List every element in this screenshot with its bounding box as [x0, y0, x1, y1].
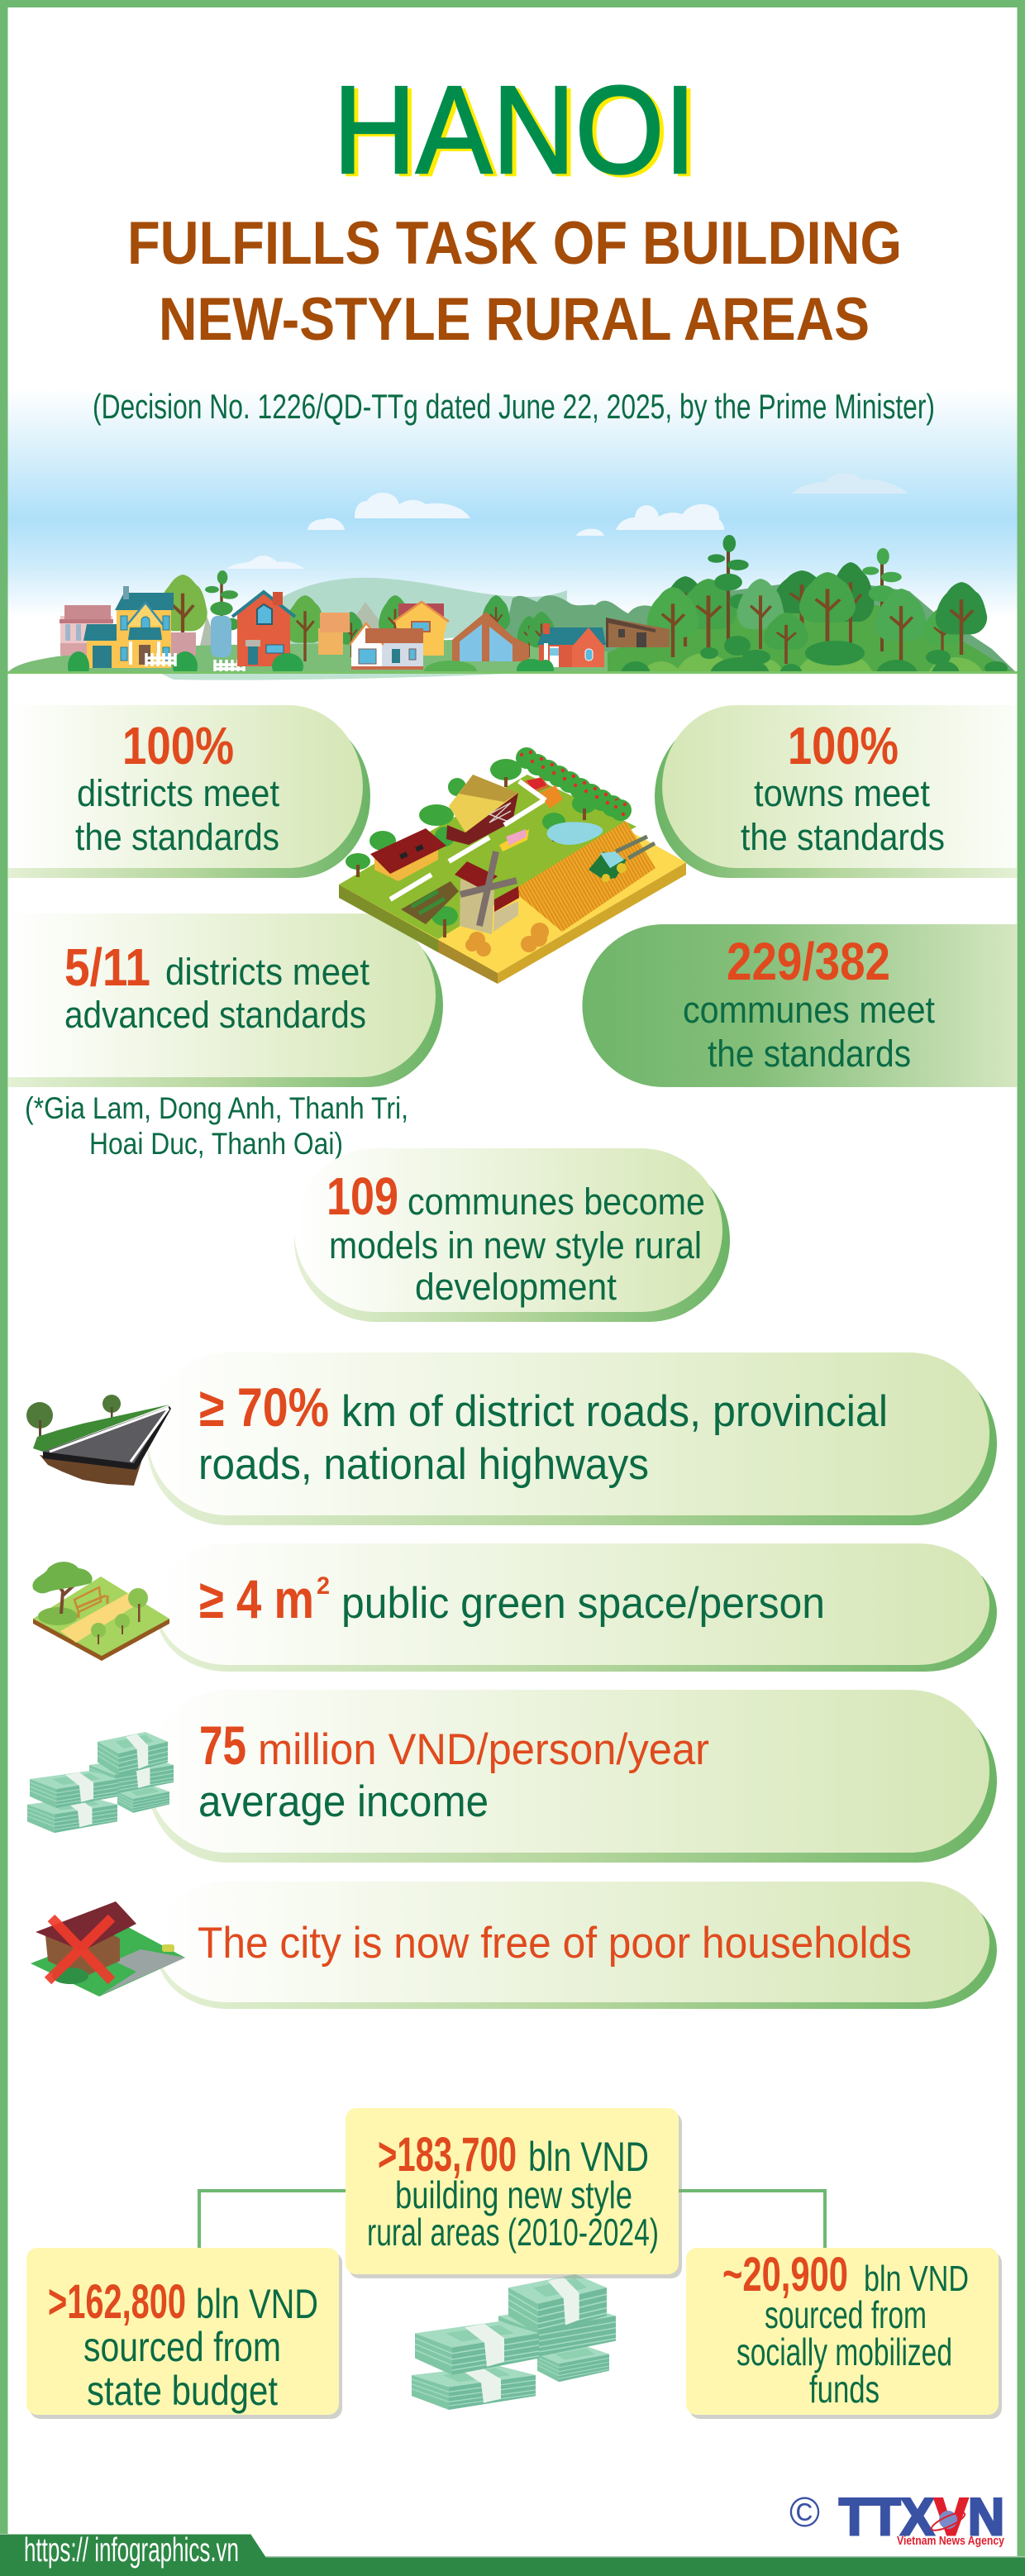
hay bales: [465, 923, 549, 956]
description: [75, 772, 279, 858]
stat: 75: [199, 1715, 246, 1776]
footnote: list of districts: (*Gia Lam, Dong Anh, Thanh Tri,: [25, 1091, 408, 1125]
description: roads, national highways: [198, 1440, 649, 1489]
subtitle: NEW-STYLE RURAL AREAS: [159, 286, 870, 353]
forest domes: [647, 653, 982, 671]
ground reflection: [161, 674, 504, 680]
subtitle: FULFILLS TASK OF BUILDING: [127, 210, 902, 277]
fruit truck: [523, 777, 550, 794]
panel: 229/382 communes: [582, 924, 1017, 1087]
footer bar: [0, 2534, 1025, 2576]
stat: 229/382: [727, 932, 890, 991]
stat: 100%: [788, 716, 899, 775]
pink house: [60, 616, 112, 643]
fences: [145, 653, 245, 673]
box: total funding: [346, 2108, 682, 2278]
unit: bln VND: [196, 2281, 318, 2327]
description: districts meet: [77, 772, 279, 814]
tractor: [589, 852, 627, 880]
illustration: isometric farm: [339, 747, 686, 984]
ground left: [8, 640, 608, 671]
description: communes meet: [683, 989, 935, 1031]
stat: 5/11: [64, 937, 150, 997]
trees: [346, 759, 597, 937]
income value: million VND/person/year: [258, 1725, 709, 1774]
description: advanced standards: [64, 994, 366, 1036]
stat: ≥ 70%: [199, 1376, 329, 1438]
red small house: [539, 643, 604, 667]
yellow house: [117, 610, 171, 668]
description: state budget: [87, 2368, 278, 2414]
long house: [374, 848, 438, 881]
description: districts meet: [165, 951, 369, 993]
white house: [382, 643, 423, 666]
box: socially mobilized funds: [686, 2248, 1002, 2419]
barn: [446, 793, 518, 845]
description: the standards: [741, 816, 945, 858]
title: Hanoi: HANOI: [333, 60, 696, 199]
description: development: [415, 1266, 617, 1308]
panel: 5/11 districts advanced: [8, 914, 443, 1087]
description: public green space/person: [341, 1579, 825, 1628]
box: state budget: [26, 2248, 342, 2419]
stat: 2: [317, 1572, 330, 1600]
statement: The city is now free of poor households: [198, 1919, 912, 1968]
description: socially mobilized: [737, 2330, 952, 2373]
wheat field: [512, 821, 656, 932]
description: [83, 2324, 281, 2414]
stat: 100%: [122, 716, 234, 775]
icon: crossed-out house: [31, 1901, 185, 1996]
description: km of district roads, provincial: [341, 1387, 888, 1436]
logo: TTXVN: TTXVN: [839, 2488, 1004, 2546]
subtitle: [127, 210, 902, 353]
description: the standards: [75, 816, 279, 858]
icon: road: [26, 1395, 171, 1486]
wooden cabin: [606, 618, 670, 647]
description: sourced from: [83, 2324, 281, 2370]
description: [737, 2293, 952, 2411]
copyright symbol: ©: [789, 2488, 820, 2535]
footnote: list of districts: [25, 1091, 408, 1161]
illustration: money stacks: [412, 2274, 616, 2410]
sky gradient background: [7, 389, 1018, 675]
forest bushes: [622, 636, 1008, 671]
icon: money stacks: [27, 1732, 174, 1833]
description: models in new style rural: [329, 1224, 702, 1267]
panel: green space: [156, 1543, 997, 1672]
pond: [547, 822, 603, 845]
logo: TTXVN: Vietnam News Agency: [897, 2534, 1005, 2548]
description: [64, 951, 369, 1036]
farm base: [339, 885, 438, 952]
icon: park: [32, 1562, 169, 1661]
red house: [237, 610, 290, 666]
illustration: village and forest landscape: [7, 535, 1018, 674]
vegetable plots: [401, 881, 459, 924]
description: [198, 1387, 888, 1489]
title: Hanoi: HANOI: [337, 62, 700, 202]
panel: income: [147, 1690, 997, 1863]
unit: bln VND: [864, 2259, 969, 2299]
stat: 109: [327, 1166, 398, 1226]
description: funds: [809, 2368, 880, 2411]
back trees among houses: [164, 575, 207, 632]
forest hillside: [608, 604, 1012, 671]
stat: ~20,900: [722, 2248, 848, 2302]
description: communes become: [408, 1181, 705, 1223]
ground strip: [7, 671, 1018, 674]
forest trees: [670, 576, 698, 646]
description: the standards: [708, 1033, 911, 1075]
orange house back: [318, 628, 343, 655]
stat: ≥ 4 m: [199, 1568, 314, 1629]
windmill: [460, 879, 494, 934]
footnote: list of districts: Hoai Duc, Thanh Oai): [89, 1127, 343, 1161]
description: sourced from: [765, 2293, 927, 2336]
stat: >183,700: [378, 2128, 517, 2182]
description: average income: [198, 1777, 489, 1826]
distant hills: [283, 577, 567, 644]
panel: roads: [147, 1352, 997, 1525]
description: rural areas (2010-2024): [367, 2211, 659, 2254]
panel: 109 communes models: [294, 1148, 730, 1322]
unit: bln VND: [528, 2134, 649, 2180]
connector lines: [199, 2191, 825, 2249]
panel: 100% towns: [655, 705, 1017, 878]
yellow house two: [423, 637, 444, 656]
footer url: https:// infographics.vn: [24, 2531, 239, 2569]
apple orchard: [516, 747, 632, 821]
white fences: [390, 781, 546, 899]
panel: 100% districts: [8, 705, 370, 878]
stat: >162,800: [48, 2275, 186, 2329]
description: [367, 2173, 659, 2254]
clouds: [226, 473, 908, 569]
description: [741, 772, 945, 858]
description: building new style: [395, 2173, 632, 2216]
description: [683, 989, 935, 1075]
glass house: [452, 612, 529, 661]
yellow truck: [499, 829, 529, 852]
panel: poverty: [156, 1882, 997, 2009]
description: [329, 1181, 705, 1308]
description: towns meet: [754, 772, 930, 814]
